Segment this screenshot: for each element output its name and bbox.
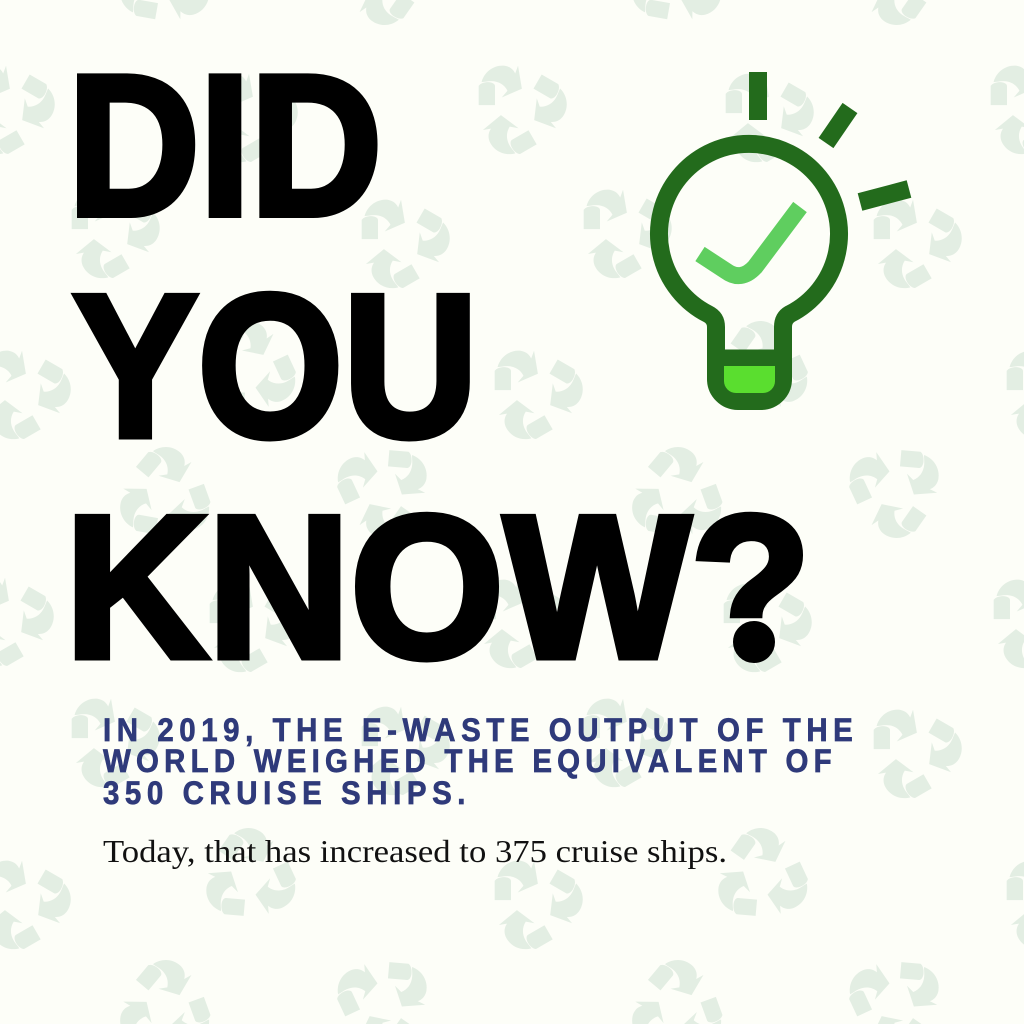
title: YOU	[73, 253, 478, 480]
headline text: IN 2019, THE E-WASTE OUTPUT OF THE	[103, 712, 853, 748]
title: KNOW?	[65, 474, 811, 701]
headline text: 350 CRUISE SHIPS.	[103, 775, 465, 811]
body text: Today, that has increased to 375 cruise ships.	[103, 833, 727, 869]
bulb base divider	[716, 350, 783, 366]
headline text	[103, 712, 853, 811]
light rays	[758, 72, 909, 202]
bulb base fill	[724, 366, 775, 393]
title: DID	[68, 34, 382, 258]
title	[70, 73, 803, 663]
check mark	[700, 207, 800, 276]
headline text: WORLD WEIGHED THE EQUIVALENT OF	[103, 743, 832, 779]
bulb outline	[659, 144, 839, 401]
icon: light bulb with check mark	[659, 72, 909, 401]
